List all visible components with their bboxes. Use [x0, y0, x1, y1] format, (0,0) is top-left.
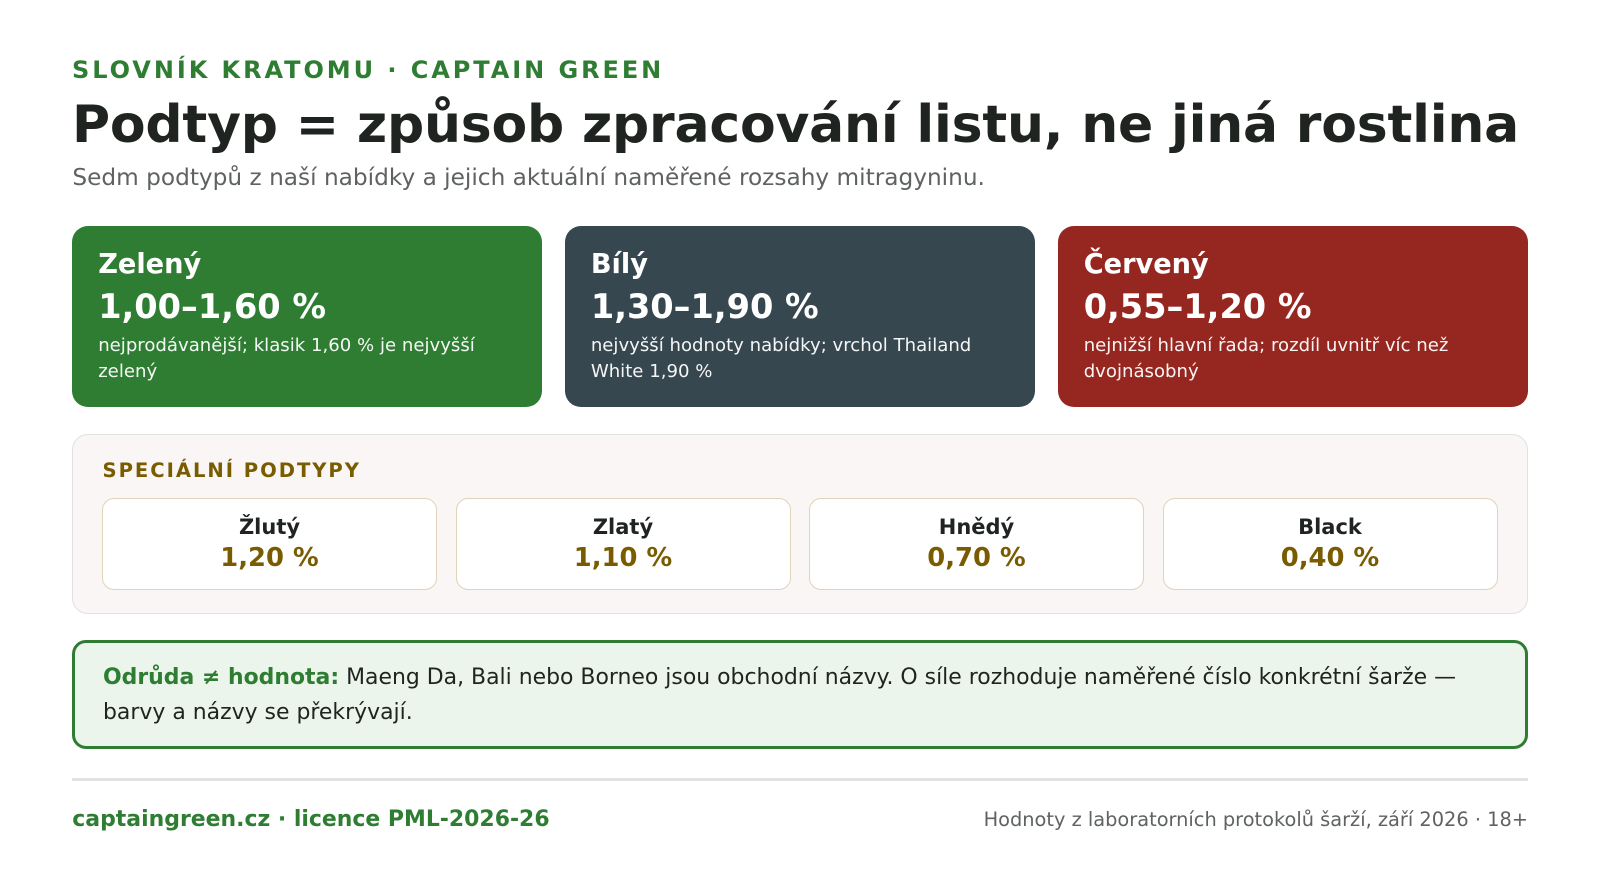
- panel: special subtypes: [72, 434, 1528, 614]
- name: Červený: Červený: [1084, 249, 1209, 280]
- name: Zlatý: Zlatý: [593, 515, 653, 539]
- panel: Červený: [1058, 226, 1528, 407]
- callout: variety is not value: [72, 640, 1528, 749]
- footer: data note: Hodnoty z laboratorních protokolů šarží, září 2026 · 18+: [984, 808, 1528, 830]
- name: Bílý: Bílý: [591, 249, 648, 280]
- subtitle: Sedm podtypů z naší nabídky a jejich aktuální naměřené rozsahy mitragyninu.: [72, 164, 985, 191]
- name: Black: Black: [1298, 515, 1362, 539]
- value: Hnědý: 0,70 %: [927, 543, 1026, 573]
- panel: Zelený: [72, 226, 542, 407]
- value: Žlutý: 1,20 %: [220, 543, 319, 573]
- callout: variety is not value: Odrůda ≠ hodnota: Maeng Da, Bali nebo Borneo jsou obchodní názvy. O síle rozhoduje naměřené číslo konkrétní šarže — barvy a názvy se překrývají.: [103, 665, 1456, 725]
- value: Bílý range: 1,30–1,90 %: [591, 287, 819, 326]
- value: Červený range: 0,55–1,20 %: [1084, 287, 1312, 326]
- box: Zlatý: [456, 498, 790, 590]
- name: Žlutý: Žlutý: [239, 515, 300, 539]
- eyebrow: SLOVNÍK KRATOMU · CAPTAIN GREEN: [72, 56, 664, 84]
- heading: special subtypes: SPECIÁLNÍ PODTYPY: [102, 459, 361, 482]
- box: Hnědý: [809, 498, 1144, 590]
- title: Podtyp = způsob zpracování listu, ne jiná rostlina: [72, 95, 1519, 155]
- note: Zelený: nejprodávanější; klasik 1,60 % je nejvyšší zelený: [98, 335, 475, 382]
- note: Bílý: nejvyšší hodnoty nabídky; vrchol Thailand White 1,90 %: [591, 335, 971, 382]
- box: Žlutý: [102, 498, 437, 590]
- name: Hnědý: Hnědý: [939, 515, 1014, 539]
- value: Zelený range: 1,00–1,60 %: [98, 287, 326, 326]
- box: Black: [1162, 498, 1498, 590]
- panel: Bílý: [565, 226, 1035, 407]
- footer: source brand: captaingreen.cz · licence PML-2026-26: [72, 807, 550, 832]
- note: Červený: nejnižší hlavní řada; rozdíl uvnitř víc než dvojnásobný: [1084, 335, 1448, 382]
- value: Black: 0,40 %: [1281, 543, 1379, 573]
- value: Zlatý: 1,10 %: [574, 543, 672, 573]
- name: Zelený: Zelený: [98, 249, 201, 280]
